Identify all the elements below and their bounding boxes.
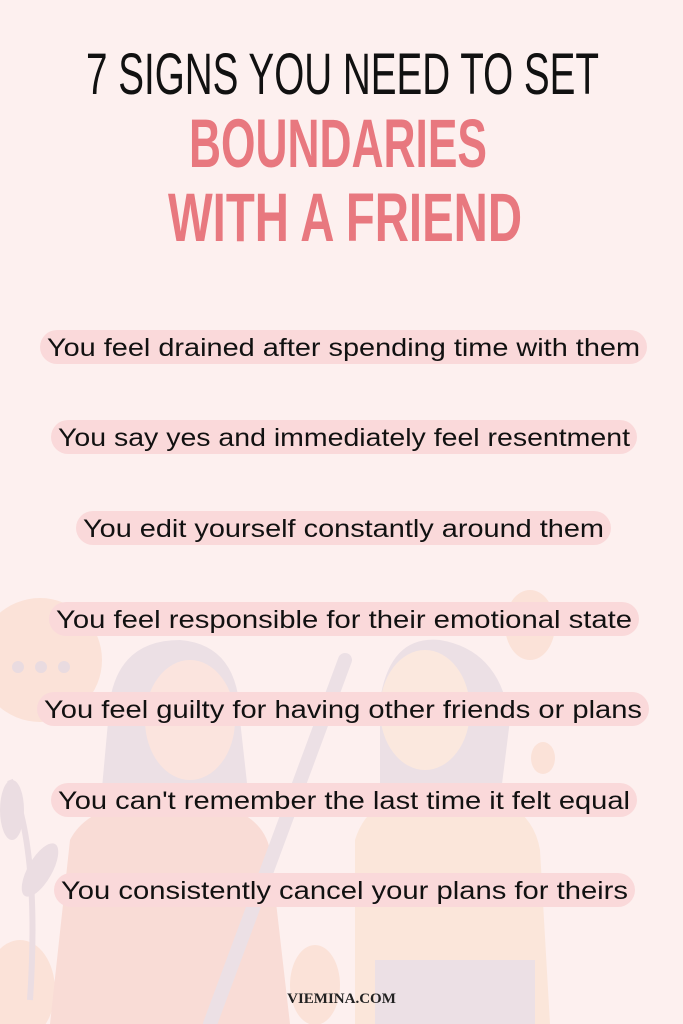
sign 3: [76, 511, 611, 545]
sign 7: You consistently cancel your plans for theirs: [61, 877, 628, 905]
sign 7: [54, 873, 635, 907]
sign 5: [37, 692, 649, 726]
stick: [210, 660, 345, 1024]
sign 1: You feel drained after spending time with them: [47, 334, 640, 362]
footer: website: VIEMINA.COM: [287, 991, 396, 1007]
title: [86, 42, 599, 256]
sign 4: You feel responsible for their emotional state: [56, 606, 632, 634]
sign 3: You edit yourself constantly around them: [83, 515, 604, 543]
sign 6: [51, 783, 637, 817]
title: WITH A FRIEND: [168, 179, 522, 256]
sign 1: [40, 330, 647, 364]
sign 6: You can't remember the last time it felt equal: [58, 787, 630, 815]
sign 4: [49, 602, 639, 636]
sign 5: You feel guilty for having other friends or plans: [44, 696, 642, 724]
background illustration: two friends: [0, 590, 555, 1024]
right woman: [380, 640, 510, 800]
left woman: [100, 640, 250, 810]
title: BOUNDARIES: [189, 105, 487, 182]
sign 2: You say yes and immediately feel resentment: [58, 424, 630, 452]
